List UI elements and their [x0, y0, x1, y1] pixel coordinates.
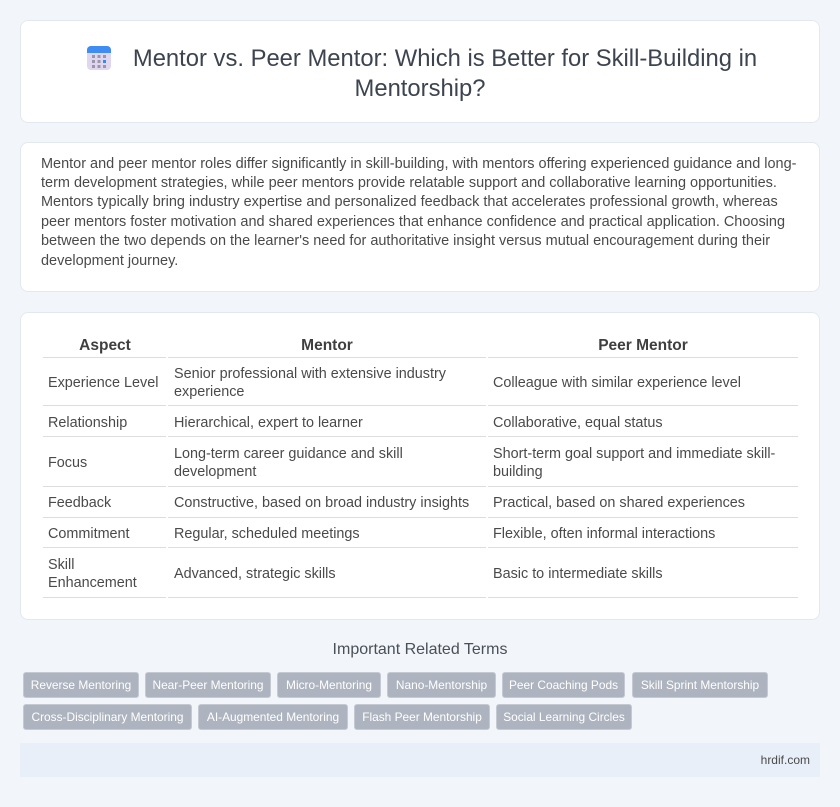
- title: Mentor vs. Peer Mentor: Which is Better for Skill-Building in: [133, 45, 757, 72]
- row: skill enhancement: Enhancement: [48, 575, 137, 591]
- row: relationship: [48, 415, 663, 431]
- row: feedback: Constructive, based on broad industry insights: [174, 495, 469, 511]
- row: relationship: Collaborative, equal status: [493, 415, 663, 431]
- row: skill enhancement: [48, 557, 663, 591]
- related terms tags: Peer Coaching Pods: [509, 678, 618, 692]
- summary text: peer mentors foster motivation and shared experiences that enhance confidence and practical application. Choosing: [41, 214, 785, 230]
- summary text: Mentors typically bring industry expertise and personalized feedback that accelerates professional growth, whereas: [41, 194, 778, 210]
- related terms tags: [23, 672, 768, 730]
- summary text: development journey.: [41, 253, 178, 269]
- table headings: Aspect: [79, 337, 131, 354]
- row: focus: [48, 446, 775, 480]
- title: Mentorship?: [355, 75, 485, 102]
- row: focus: Short-term goal support and immediate skill-: [493, 446, 775, 462]
- row: feedback: [48, 495, 745, 511]
- row: skill enhancement: Advanced, strategic skills: [174, 566, 336, 582]
- row: relationship: Hierarchical, expert to learner: [174, 415, 363, 431]
- comparison table panel: [20, 312, 820, 620]
- row: skill enhancement: Basic to intermediate skills: [493, 566, 663, 582]
- related terms tags: Micro-Mentoring: [286, 678, 372, 692]
- row: focus: Focus: [48, 455, 87, 471]
- summary text: [41, 156, 796, 269]
- row: commitment: Flexible, often informal interactions: [493, 526, 715, 542]
- icon: calendar: [87, 46, 111, 70]
- table headings: Peer Mentor: [598, 337, 688, 354]
- row: focus: building: [493, 464, 543, 480]
- related terms tags: AI-Augmented Mentoring: [207, 710, 339, 724]
- row: skill enhancement: Skill: [48, 557, 74, 573]
- related terms tags: Near-Peer Mentoring: [152, 678, 264, 692]
- row: experience level: [48, 366, 741, 400]
- row: relationship: Relationship: [48, 415, 127, 431]
- row: commitment: Commitment: [48, 526, 130, 542]
- related terms tags: Social Learning Circles: [503, 710, 625, 724]
- row: feedback: Feedback: [48, 495, 111, 511]
- related terms tags: Flash Peer Mentorship: [362, 710, 482, 724]
- summary text: term development strategies, while peer mentors provide relatable support and collaborative learning opportunities.: [41, 175, 777, 191]
- related terms tags: Cross-Disciplinary Mentoring: [32, 710, 183, 724]
- row: experience level: Experience Level: [48, 375, 158, 391]
- footer bar: [20, 743, 820, 777]
- row: experience level: experience: [174, 384, 244, 400]
- row: focus: Long-term career guidance and skill: [174, 446, 403, 462]
- summary panel: [20, 142, 820, 292]
- summary text: Mentor and peer mentor roles differ significantly in skill-building, with mentors offering experienced guidance and long-: [41, 156, 796, 172]
- related terms heading: Important Related Terms: [333, 641, 507, 658]
- table headings: [79, 337, 688, 354]
- header panel: [20, 20, 820, 123]
- related terms tags: Reverse Mentoring: [31, 678, 131, 692]
- row: commitment: [48, 526, 715, 542]
- row: experience level: Colleague with similar experience level: [493, 375, 741, 391]
- summary text: between the two depends on the learner's need for authoritative insight versus mutual encouragement during their: [41, 233, 770, 249]
- related terms tags: Nano-Mentorship: [396, 678, 487, 692]
- table headings: Mentor: [301, 337, 353, 354]
- row: experience level: Senior professional with extensive industry: [174, 366, 446, 382]
- row: feedback: Practical, based on shared experiences: [493, 495, 745, 511]
- related terms tags: Skill Sprint Mentorship: [641, 678, 759, 692]
- title: [133, 45, 757, 102]
- row: focus: development: [174, 464, 256, 480]
- row: commitment: Regular, scheduled meetings: [174, 526, 360, 542]
- footer source: hrdif.com: [761, 753, 810, 767]
